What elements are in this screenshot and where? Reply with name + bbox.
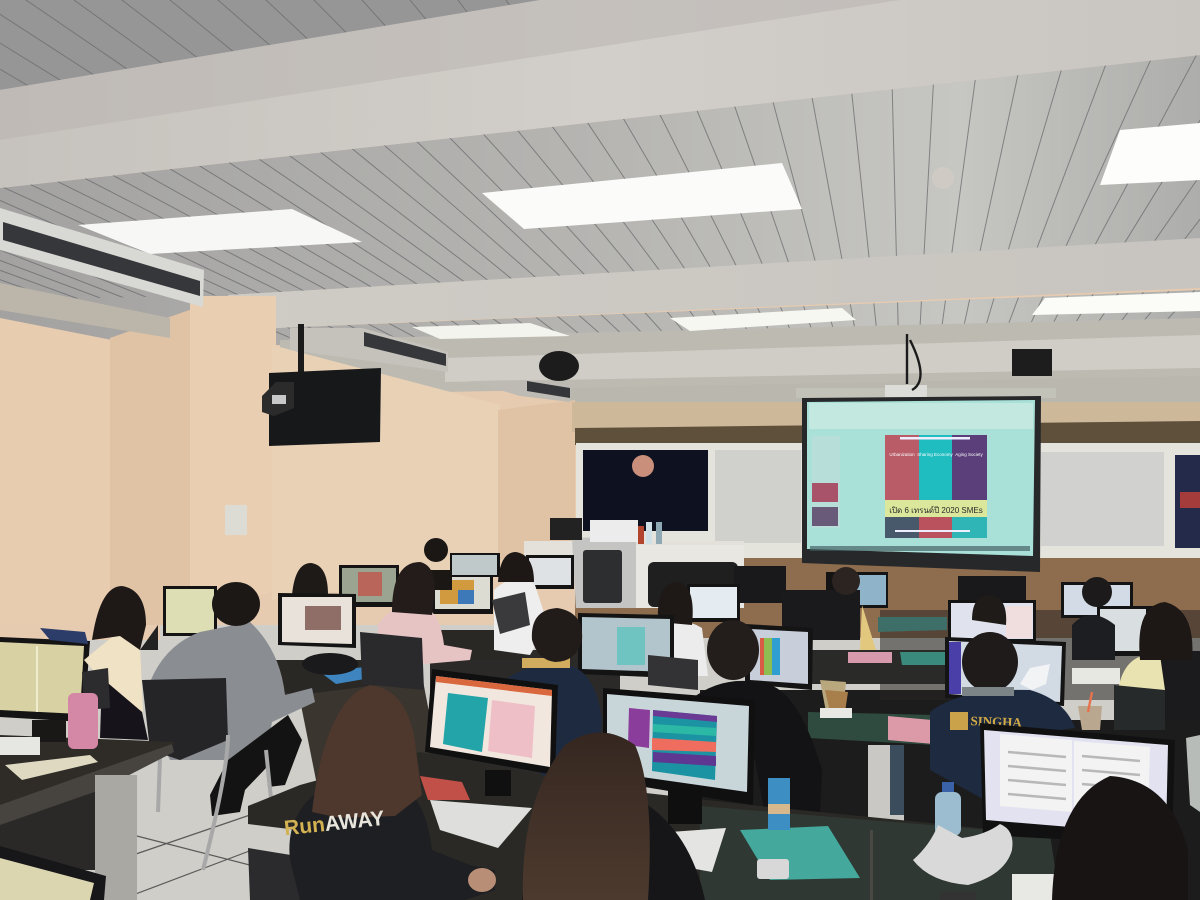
podium and back-row equipment [524,518,1026,614]
middle row monitors [0,593,1066,722]
left desk [0,693,176,900]
water bottle and plastic bag [913,782,1054,900]
projection screen [802,396,1041,572]
ceiling lights [78,123,1200,339]
speakers and projector [539,334,1056,398]
chairs [82,632,1165,900]
projection screen: เปิด 6 เทรนด์ปี 2020 SMEs [889,505,983,515]
ceiling [0,0,1200,402]
middle students: SINGHA [970,713,1023,730]
projection screen: Sharing Economy [917,452,954,457]
back rows monitors [163,553,1200,721]
drink cups [820,680,1102,730]
middle desks [255,617,1120,745]
front students: RunAWAY [283,807,386,840]
front students [283,685,1188,900]
floor [0,608,1200,900]
front desks [248,752,1060,900]
front row monitors [425,669,1175,845]
singha logo [950,712,968,730]
back whiteboards [576,443,1200,558]
projection screen: Urbanization [889,452,915,457]
back students [292,538,1192,690]
walls and pillars [0,296,1200,640]
middle students [40,582,1075,816]
TV on ceiling mount [262,324,381,446]
under-desk shadows [255,610,1200,900]
air conditioners [0,208,572,402]
projection screen: Aging Society [955,452,984,457]
